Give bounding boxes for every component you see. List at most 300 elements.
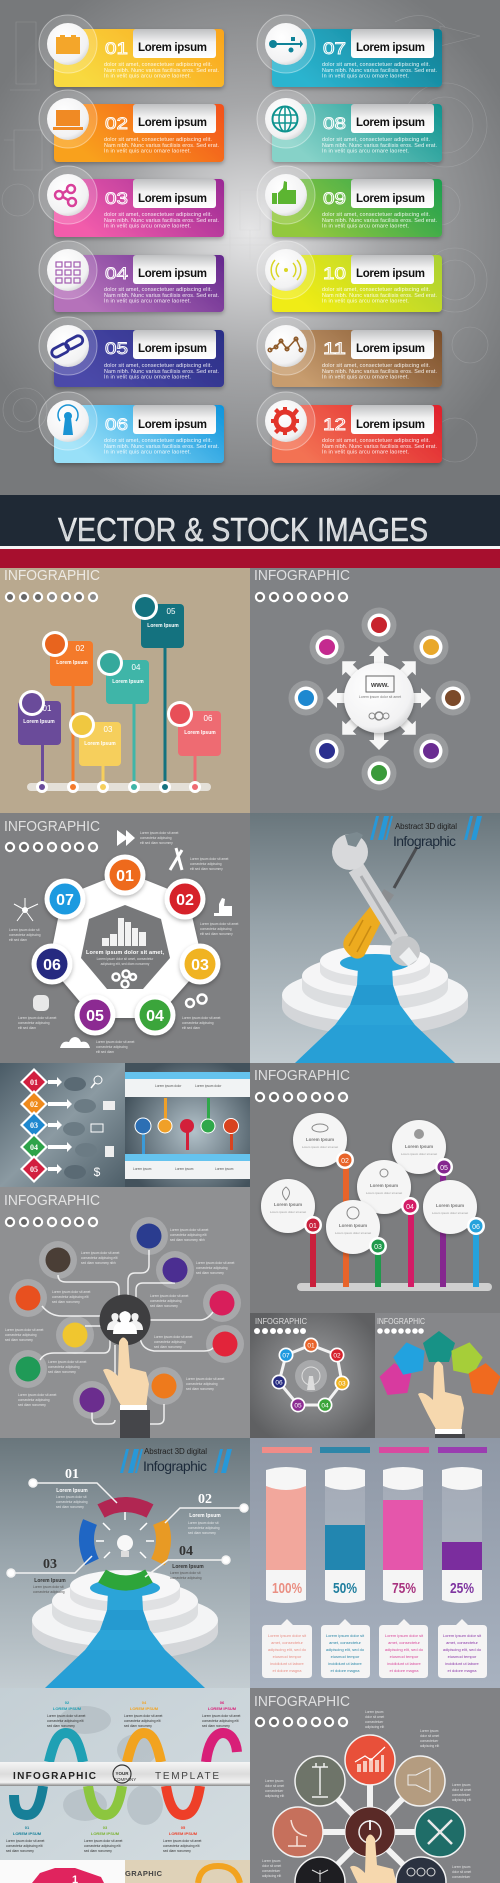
notes: consectetuer bbox=[452, 1875, 471, 1879]
notes: Lorem ipsum dolor sit amet bbox=[186, 1377, 225, 1381]
bubble 04: Lorem ipsum dolor sit amet bbox=[366, 1191, 402, 1195]
panel: tools on podium bbox=[250, 813, 500, 1063]
step 01 bbox=[18, 690, 61, 793]
notes: consectetuer bbox=[420, 1739, 439, 1743]
small badges: 01 bbox=[307, 1342, 315, 1350]
centre power button bbox=[345, 1807, 395, 1857]
bubble 06: Lorem ipsum dolor sit amet bbox=[432, 1211, 468, 1215]
bottom text blocks bbox=[6, 1825, 202, 1853]
ring circle: tree bbox=[295, 1857, 345, 1883]
panel: pentagons with hand bbox=[375, 1313, 500, 1464]
screwdriver bbox=[343, 847, 417, 959]
number badges: 06 bbox=[472, 1224, 480, 1231]
callout 3: Lorem ipsum dolor sit bbox=[385, 1633, 424, 1638]
panel: central hub with hand bbox=[0, 1187, 250, 1440]
card 09: Lorem ipsum bbox=[356, 193, 425, 205]
bubble 05: Lorem Ipsum bbox=[405, 1144, 433, 1149]
company badge bbox=[113, 1765, 136, 1783]
card 10: Lorem ipsum bbox=[356, 268, 425, 280]
bottom text blocks: consectetur adipiscing elit bbox=[84, 1844, 121, 1848]
central hub bbox=[100, 1294, 150, 1346]
callout 3: eiusmod tempor bbox=[390, 1654, 419, 1659]
notes: Lorem ipsum bbox=[262, 1859, 281, 1863]
side notes and icons: consectetur adipiscing bbox=[182, 1021, 214, 1025]
numbers: 01 bbox=[65, 1467, 79, 1482]
bottom text blocks: LOREM IPSUM bbox=[169, 1831, 198, 1836]
card 02 bbox=[39, 90, 224, 162]
icon: thumbs up bbox=[272, 181, 296, 204]
notes: dolor sit amet bbox=[262, 1864, 281, 1868]
notes: sed diam nonummy bbox=[154, 1345, 182, 1349]
panel: radial arrows infographic bbox=[250, 567, 500, 813]
icon: laptop bbox=[53, 110, 83, 130]
hand pointer bbox=[418, 1362, 465, 1464]
step 04: Lorem Ipsum bbox=[112, 679, 144, 685]
callout 3: et dolore magna bbox=[390, 1668, 419, 1673]
side notes and icons: Lorem ipsum dolor sit amet bbox=[190, 857, 229, 861]
card 12: In in velit quis arcu ornare laoreet. bbox=[322, 450, 409, 456]
notes: sed diam nonummy bbox=[48, 1370, 76, 1374]
card 08: Nam nibh. Nunc varius facilisis eros. Sed erat. bbox=[322, 143, 437, 149]
tube 100%: 100% bbox=[272, 1580, 302, 1597]
panel: twelve numbered cards bbox=[0, 0, 500, 495]
icon row bbox=[255, 1092, 348, 1102]
bubble 02: Lorem Ipsum bbox=[306, 1137, 334, 1142]
notes: sed diam nonummy bbox=[186, 1387, 214, 1391]
badge 04: 04 bbox=[146, 1008, 164, 1025]
callout 3: amet, consectetur bbox=[388, 1640, 421, 1645]
badge 03 bbox=[180, 944, 220, 984]
card 01: Nam nibh. Nunc varius facilisis eros. Sed erat. bbox=[104, 68, 219, 74]
ring circle: megaphone bbox=[395, 1756, 445, 1806]
notes: Lorem ipsum dolor sit amet bbox=[196, 1261, 235, 1265]
notes: consectetur adipiscing bbox=[196, 1266, 228, 1270]
bottom band bbox=[125, 1154, 250, 1179]
tube 50% bbox=[320, 1447, 370, 1603]
card 01 bbox=[39, 15, 224, 87]
icon: line chart bbox=[268, 337, 303, 352]
number badges: 01 bbox=[309, 1223, 317, 1230]
callout 2: amet, consectetur bbox=[329, 1640, 362, 1645]
side notes and icons: elit sed diam nonummy bbox=[190, 867, 223, 871]
bubble 06: Lorem Ipsum bbox=[436, 1203, 464, 1208]
arc segments bbox=[86, 1504, 164, 1583]
card 05: Nam nibh. Nunc varius facilisis eros. Sed erat. bbox=[104, 369, 219, 375]
step 02: Lorem Ipsum bbox=[56, 660, 88, 666]
side notes and icons: elit sed diam nonummy bbox=[200, 932, 233, 936]
number badges: 04 bbox=[406, 1204, 414, 1211]
badge 04 bbox=[134, 994, 176, 1036]
callout labels: Lorem ipsum dolor sit bbox=[56, 1495, 87, 1499]
callout 4: adipiscing elit, sed do bbox=[443, 1647, 482, 1652]
card 04: dolor sit amet, consectetuer adipiscing elit. bbox=[104, 287, 212, 293]
heading: INFOGRAPHIC bbox=[254, 1067, 350, 1084]
callout labels: Lorem Ipsum bbox=[189, 1513, 221, 1519]
tube 25%: 25% bbox=[450, 1580, 474, 1597]
icon row bbox=[5, 1217, 98, 1227]
card 08: Lorem ipsum bbox=[356, 117, 425, 129]
callout labels: Lorem ipsum dolor sit bbox=[33, 1585, 64, 1589]
step 03: 03 bbox=[104, 725, 113, 734]
ring circle: satellite dish bbox=[273, 1807, 323, 1857]
bubble 03: Lorem ipsum dolor sit amet bbox=[335, 1231, 371, 1235]
card 10: 10 bbox=[323, 264, 346, 283]
card 05 bbox=[39, 317, 224, 387]
icon: chain link bbox=[50, 334, 84, 359]
side notes and icons: elit sed diam bbox=[96, 1050, 114, 1054]
background doodles bbox=[2, 16, 488, 462]
callout 4: Lorem ipsum dolor sit bbox=[443, 1633, 482, 1638]
bottom text blocks: consectetur adipiscing elit bbox=[163, 1844, 200, 1848]
top text blocks: sed diam nonummy bbox=[47, 1724, 75, 1728]
card 03 bbox=[39, 166, 224, 237]
callout labels: sed diam nonummy bbox=[188, 1531, 216, 1535]
bulb with rays bbox=[96, 1510, 154, 1558]
center disc: Lorem ipsum dolor sit amet bbox=[359, 695, 401, 699]
numbers: 04 bbox=[179, 1544, 193, 1559]
notes: consectetuer bbox=[265, 1789, 284, 1793]
card 06 bbox=[39, 392, 224, 463]
center disc bbox=[344, 663, 414, 733]
small badges: 04 bbox=[321, 1402, 329, 1410]
card 06: dolor sit amet, consectetuer adipiscing elit. bbox=[104, 438, 212, 444]
notes: Lorem ipsum bbox=[420, 1729, 439, 1733]
panel: cropped tan thumbnail bbox=[125, 1860, 250, 1883]
step 01: Lorem Ipsum bbox=[23, 719, 55, 725]
tube 25% bbox=[438, 1447, 487, 1603]
callout labels: Lorem Ipsum bbox=[56, 1488, 88, 1494]
step 04: 04 bbox=[132, 663, 141, 672]
bottom text blocks: sed diam nonummy bbox=[163, 1849, 191, 1853]
callout 1: adipiscing elit, sed do bbox=[268, 1647, 307, 1652]
bubble 02 bbox=[293, 1113, 347, 1167]
card 05: In in velit quis arcu ornare laoreet. bbox=[104, 374, 191, 380]
notes: adipiscing elit bbox=[452, 1798, 471, 1802]
callout labels: consectetur adipiscing bbox=[33, 1590, 65, 1594]
bottom text blocks: 03 bbox=[103, 1825, 108, 1830]
spokes bbox=[298, 1780, 440, 1882]
top text blocks: consectetur adipiscing elit bbox=[202, 1719, 239, 1723]
step 03 bbox=[69, 712, 121, 793]
card 09: In in velit quis arcu ornare laoreet. bbox=[322, 224, 409, 230]
callout 4: et dolore magna bbox=[448, 1668, 477, 1673]
callout labels bbox=[33, 1488, 221, 1594]
company badge: YOUR bbox=[115, 1771, 129, 1776]
step 06 bbox=[167, 701, 221, 793]
panel: glass tube chart bbox=[250, 1438, 500, 1688]
callout labels: sed diam nonummy bbox=[56, 1505, 84, 1509]
panel: speech bubble timeline bbox=[250, 1063, 500, 1313]
card 05: dolor sit amet, consectetuer adipiscing elit. bbox=[104, 363, 212, 369]
notes bbox=[5, 1228, 235, 1407]
icon: battery bbox=[56, 35, 80, 54]
icon row bbox=[255, 1717, 348, 1727]
card 09: dolor sit amet, consectetuer adipiscing elit. bbox=[322, 212, 430, 218]
small badges: 07 bbox=[282, 1352, 290, 1360]
notes: consectetur adipiscing bbox=[18, 1398, 50, 1402]
small badges: 06 bbox=[275, 1380, 283, 1386]
ring bbox=[279, 1345, 342, 1405]
side notes and icons: consectetur adipiscing bbox=[9, 933, 41, 937]
side notes and icons: Lorem ipsum dolor sit amet bbox=[140, 831, 179, 835]
card 04 bbox=[39, 241, 224, 312]
badge 02: 02 bbox=[176, 892, 194, 909]
top text blocks bbox=[47, 1700, 241, 1728]
bubble 05 bbox=[392, 1120, 446, 1174]
callout labels: Lorem Ipsum bbox=[34, 1578, 66, 1584]
notes: Lorem ipsum bbox=[265, 1779, 284, 1783]
card 04: 04 bbox=[105, 264, 128, 283]
callout 3: incididunt ut labore bbox=[387, 1661, 422, 1666]
notes: dolor sit amet bbox=[420, 1734, 439, 1738]
notes: dolor sit amet bbox=[265, 1784, 284, 1788]
notes: consectetur adipiscing bbox=[48, 1365, 80, 1369]
badge 03: 03 bbox=[191, 957, 209, 974]
notes: consectetur adipiscing bbox=[154, 1340, 186, 1344]
card 04: Nam nibh. Nunc varius facilisis eros. Sed erat. bbox=[104, 293, 219, 299]
notes: consectetur adipiscing bbox=[186, 1382, 218, 1386]
ring centre: Lorem ipsum dolor sit amet, bbox=[86, 950, 164, 956]
card 01: In in velit quis arcu ornare laoreet. bbox=[104, 74, 191, 80]
card 01: Lorem ipsum bbox=[138, 42, 207, 54]
card 12: Lorem ipsum bbox=[356, 419, 425, 431]
notes: sed diam nonummy bbox=[52, 1300, 80, 1304]
logo: Infographic bbox=[393, 833, 456, 849]
pink shape bbox=[32, 1868, 104, 1883]
card 06: In in velit quis arcu ornare laoreet. bbox=[104, 450, 191, 456]
bottom text blocks: Lorem ipsum dolor sit amet bbox=[6, 1839, 45, 1843]
step 05: 05 bbox=[167, 607, 176, 616]
step 06: Lorem Ipsum bbox=[184, 730, 216, 736]
panel: hub of eight circles bbox=[250, 1688, 500, 1883]
ring centre: adipiscing elit, sed diam nonummy bbox=[101, 962, 150, 966]
card 07: Lorem ipsum bbox=[356, 42, 425, 54]
orange wave bbox=[198, 1866, 240, 1883]
icon: share bbox=[55, 185, 76, 206]
notes: consectetur adipiscing bbox=[150, 1299, 182, 1303]
band text: TEMPLATE bbox=[155, 1771, 219, 1782]
notes bbox=[262, 1710, 471, 1879]
card 12: dolor sit amet, consectetuer adipiscing elit. bbox=[322, 438, 430, 444]
callout 1: et dolore magna bbox=[273, 1668, 302, 1673]
card 03: 03 bbox=[105, 189, 128, 208]
top text blocks: LOREM IPSUM bbox=[208, 1706, 237, 1711]
bottom text blocks: Lorem ipsum dolor sit amet bbox=[84, 1839, 123, 1843]
side notes and icons: consectetur adipiscing bbox=[18, 1021, 50, 1025]
panel: cropped white thumbnail bbox=[0, 1860, 125, 1883]
notes: Lorem ipsum dolor sit amet bbox=[150, 1294, 189, 1298]
step 04 bbox=[97, 650, 149, 793]
notes: Lorem ipsum bbox=[365, 1710, 384, 1714]
badge 06 bbox=[32, 944, 72, 984]
card 11 bbox=[257, 317, 442, 387]
heading: INFOGRAPHIC bbox=[254, 567, 350, 584]
world map shapes bbox=[59, 1706, 163, 1825]
notes: Lorem ipsum dolor sit amet bbox=[81, 1251, 120, 1255]
side notes and icons: elit sed diam bbox=[182, 1026, 200, 1030]
logo: Abstract 3D digital bbox=[395, 822, 457, 831]
step 02 bbox=[42, 631, 93, 793]
top band: Lorem ipsum dolor bbox=[195, 1084, 222, 1088]
heading: INFOGRAPHIC bbox=[4, 818, 100, 835]
bottom text blocks: Lorem ipsum dolor sit amet bbox=[163, 1839, 202, 1843]
top band: Lorem ipsum dolor bbox=[155, 1084, 182, 1088]
notes: adipiscing elit bbox=[265, 1794, 284, 1798]
panel: 3D light bulb podium bbox=[0, 1438, 250, 1688]
notes: sed diam nonummy bbox=[5, 1338, 33, 1342]
notes: Lorem ipsum bbox=[452, 1783, 471, 1787]
notes: consectetuer bbox=[262, 1869, 281, 1873]
diamond 02: 02 bbox=[30, 1100, 38, 1109]
banner: vector and stock images bbox=[0, 495, 500, 568]
card 02: Nam nibh. Nunc varius facilisis eros. Sed erat. bbox=[104, 143, 219, 149]
badge 05 bbox=[74, 994, 116, 1036]
notes: adipiscing elit bbox=[420, 1744, 439, 1748]
notes: dolor sit amet bbox=[365, 1715, 384, 1719]
callout 2: eiusmod tempor bbox=[331, 1654, 360, 1659]
diamond 05: 05 bbox=[30, 1165, 38, 1174]
icon: broadcast tower bbox=[63, 412, 73, 435]
company badge: COMPANY bbox=[114, 1777, 136, 1782]
card 06: Lorem ipsum bbox=[138, 419, 207, 431]
arrows bbox=[327, 646, 431, 750]
timeline bar bbox=[27, 783, 211, 791]
top text blocks: sed diam nonummy bbox=[202, 1724, 230, 1728]
step 03: Lorem Ipsum bbox=[84, 741, 116, 747]
badge 01 bbox=[104, 854, 146, 896]
card 02: Lorem ipsum bbox=[138, 117, 207, 129]
bubble 04 bbox=[357, 1160, 411, 1214]
callout labels: Lorem Ipsum bbox=[172, 1564, 204, 1570]
notes: consectetur adipiscing bbox=[5, 1333, 37, 1337]
heading: INFOGRAPHIC bbox=[377, 1317, 425, 1326]
diamond 04: 04 bbox=[30, 1143, 38, 1152]
card 08 bbox=[257, 90, 442, 162]
icon row bbox=[5, 842, 98, 852]
plug icon bbox=[312, 1763, 328, 1797]
callout 2: incididunt ut labore bbox=[328, 1661, 363, 1666]
side notes and icons: Lorem ipsum dolor sit amet bbox=[96, 1040, 135, 1044]
podium bbox=[32, 1570, 218, 1688]
top text blocks: 02 bbox=[65, 1700, 70, 1705]
hand pointer bbox=[103, 1338, 150, 1440]
callout 1: amet, consectetur bbox=[271, 1640, 304, 1645]
step 05: Lorem Ipsum bbox=[147, 623, 179, 629]
wrench bbox=[332, 832, 420, 966]
callout labels: consectetur adipiscing bbox=[188, 1526, 220, 1530]
bubble 01: Lorem ipsum dolor sit amet bbox=[270, 1210, 306, 1214]
callout 3 bbox=[379, 1619, 428, 1678]
numbers bbox=[43, 1467, 212, 1572]
notes: adipiscing elit bbox=[365, 1725, 384, 1729]
card 02: In in velit quis arcu ornare laoreet. bbox=[104, 148, 191, 154]
band text: INFOGRAPHIC bbox=[13, 1771, 96, 1782]
top band bbox=[125, 1072, 250, 1097]
list icons: $ bbox=[94, 1165, 101, 1179]
notes: sed diam nonummy nibh bbox=[170, 1238, 205, 1242]
callout 1: eiusmod tempor bbox=[273, 1654, 302, 1659]
bottom band: Lorem ipsum bbox=[133, 1167, 152, 1171]
side notes and icons: Lorem ipsum dolor sit amet bbox=[18, 1016, 57, 1020]
card 03: In in velit quis arcu ornare laoreet. bbox=[104, 224, 191, 230]
bottom text blocks: LOREM IPSUM bbox=[91, 1831, 120, 1836]
card 08: 08 bbox=[323, 114, 346, 133]
top text blocks: Lorem ipsum dolor sit amet bbox=[47, 1714, 86, 1718]
icon: usb bbox=[269, 37, 303, 52]
panel: pins between white bands bbox=[125, 1063, 250, 1187]
panel: wave template bbox=[0, 1688, 250, 1860]
bubble 05: Lorem ipsum dolor sit amet bbox=[401, 1152, 437, 1156]
callout 4: eiusmod tempor bbox=[448, 1654, 477, 1659]
card 04: In in velit quis arcu ornare laoreet. bbox=[104, 298, 191, 304]
card 09 bbox=[257, 166, 442, 237]
step 02: 02 bbox=[76, 644, 85, 653]
card 02: 02 bbox=[105, 114, 128, 133]
notes: dolor sit amet bbox=[452, 1788, 471, 1792]
waves down bbox=[14, 1786, 200, 1815]
card 09: Nam nibh. Nunc varius facilisis eros. Sed erat. bbox=[322, 218, 437, 224]
top text blocks: Lorem ipsum dolor sit amet bbox=[202, 1714, 241, 1718]
card 05: 05 bbox=[105, 339, 128, 358]
ring centre bbox=[81, 905, 170, 989]
bottom text blocks: sed diam nonummy bbox=[6, 1849, 34, 1853]
heading: INFOGRAPHIC bbox=[4, 1192, 100, 1209]
bottom text blocks: consectetur adipiscing elit bbox=[6, 1844, 43, 1848]
notes: sed diam nonummy bbox=[150, 1304, 178, 1308]
numbers: 03 bbox=[43, 1557, 57, 1572]
timeline bar bbox=[297, 1283, 492, 1291]
card 08: dolor sit amet, consectetuer adipiscing elit. bbox=[322, 137, 430, 143]
card 07: dolor sit amet, consectetuer adipiscing elit. bbox=[322, 62, 430, 68]
card 02: dolor sit amet, consectetuer adipiscing elit. bbox=[104, 137, 212, 143]
icon: grid bbox=[56, 262, 80, 283]
card 08: In in velit quis arcu ornare laoreet. bbox=[322, 148, 409, 154]
notes: sed diam nonummy bbox=[18, 1403, 46, 1407]
tube 75%: 75% bbox=[392, 1580, 416, 1597]
card 07: Nam nibh. Nunc varius facilisis eros. Sed erat. bbox=[322, 68, 437, 74]
callout 1 bbox=[262, 1619, 312, 1678]
card 12: Nam nibh. Nunc varius facilisis eros. Sed erat. bbox=[322, 444, 437, 450]
bubble 01 bbox=[261, 1179, 315, 1233]
card 06: Nam nibh. Nunc varius facilisis eros. Sed erat. bbox=[104, 444, 219, 450]
panel: heptagon ring infographic bbox=[0, 813, 250, 1063]
title: VECTOR & STOCK IMAGES bbox=[58, 511, 428, 548]
ring circle: people bbox=[396, 1857, 446, 1883]
side notes and icons bbox=[9, 830, 239, 1054]
card 09: 09 bbox=[323, 189, 346, 208]
bottom band: Lorem ipsum bbox=[175, 1167, 194, 1171]
card 11: In in velit quis arcu ornare laoreet. bbox=[322, 374, 409, 380]
card 03: Nam nibh. Nunc varius facilisis eros. Sed erat. bbox=[104, 218, 219, 224]
tube 75% bbox=[379, 1447, 429, 1603]
heading: GRAPHIC bbox=[125, 1869, 163, 1878]
notes: adipiscing elit bbox=[262, 1874, 281, 1878]
callout 2: adipiscing elit, sed do bbox=[326, 1647, 365, 1652]
step 01: 01 bbox=[43, 704, 52, 713]
notes: Lorem ipsum dolor sit amet bbox=[5, 1328, 44, 1332]
card 07 bbox=[257, 15, 442, 87]
number badges bbox=[304, 1151, 485, 1255]
card 12 bbox=[257, 392, 442, 463]
pins bbox=[135, 1098, 238, 1154]
small badges: 02 bbox=[333, 1352, 341, 1360]
top text blocks: 04 bbox=[142, 1700, 147, 1705]
podium bbox=[282, 945, 468, 1063]
center disc: www. bbox=[370, 682, 389, 689]
bubble 03: Lorem Ipsum bbox=[339, 1223, 367, 1228]
badge 05: 05 bbox=[86, 1008, 104, 1025]
side notes and icons: consectetur adipiscing bbox=[96, 1045, 128, 1049]
